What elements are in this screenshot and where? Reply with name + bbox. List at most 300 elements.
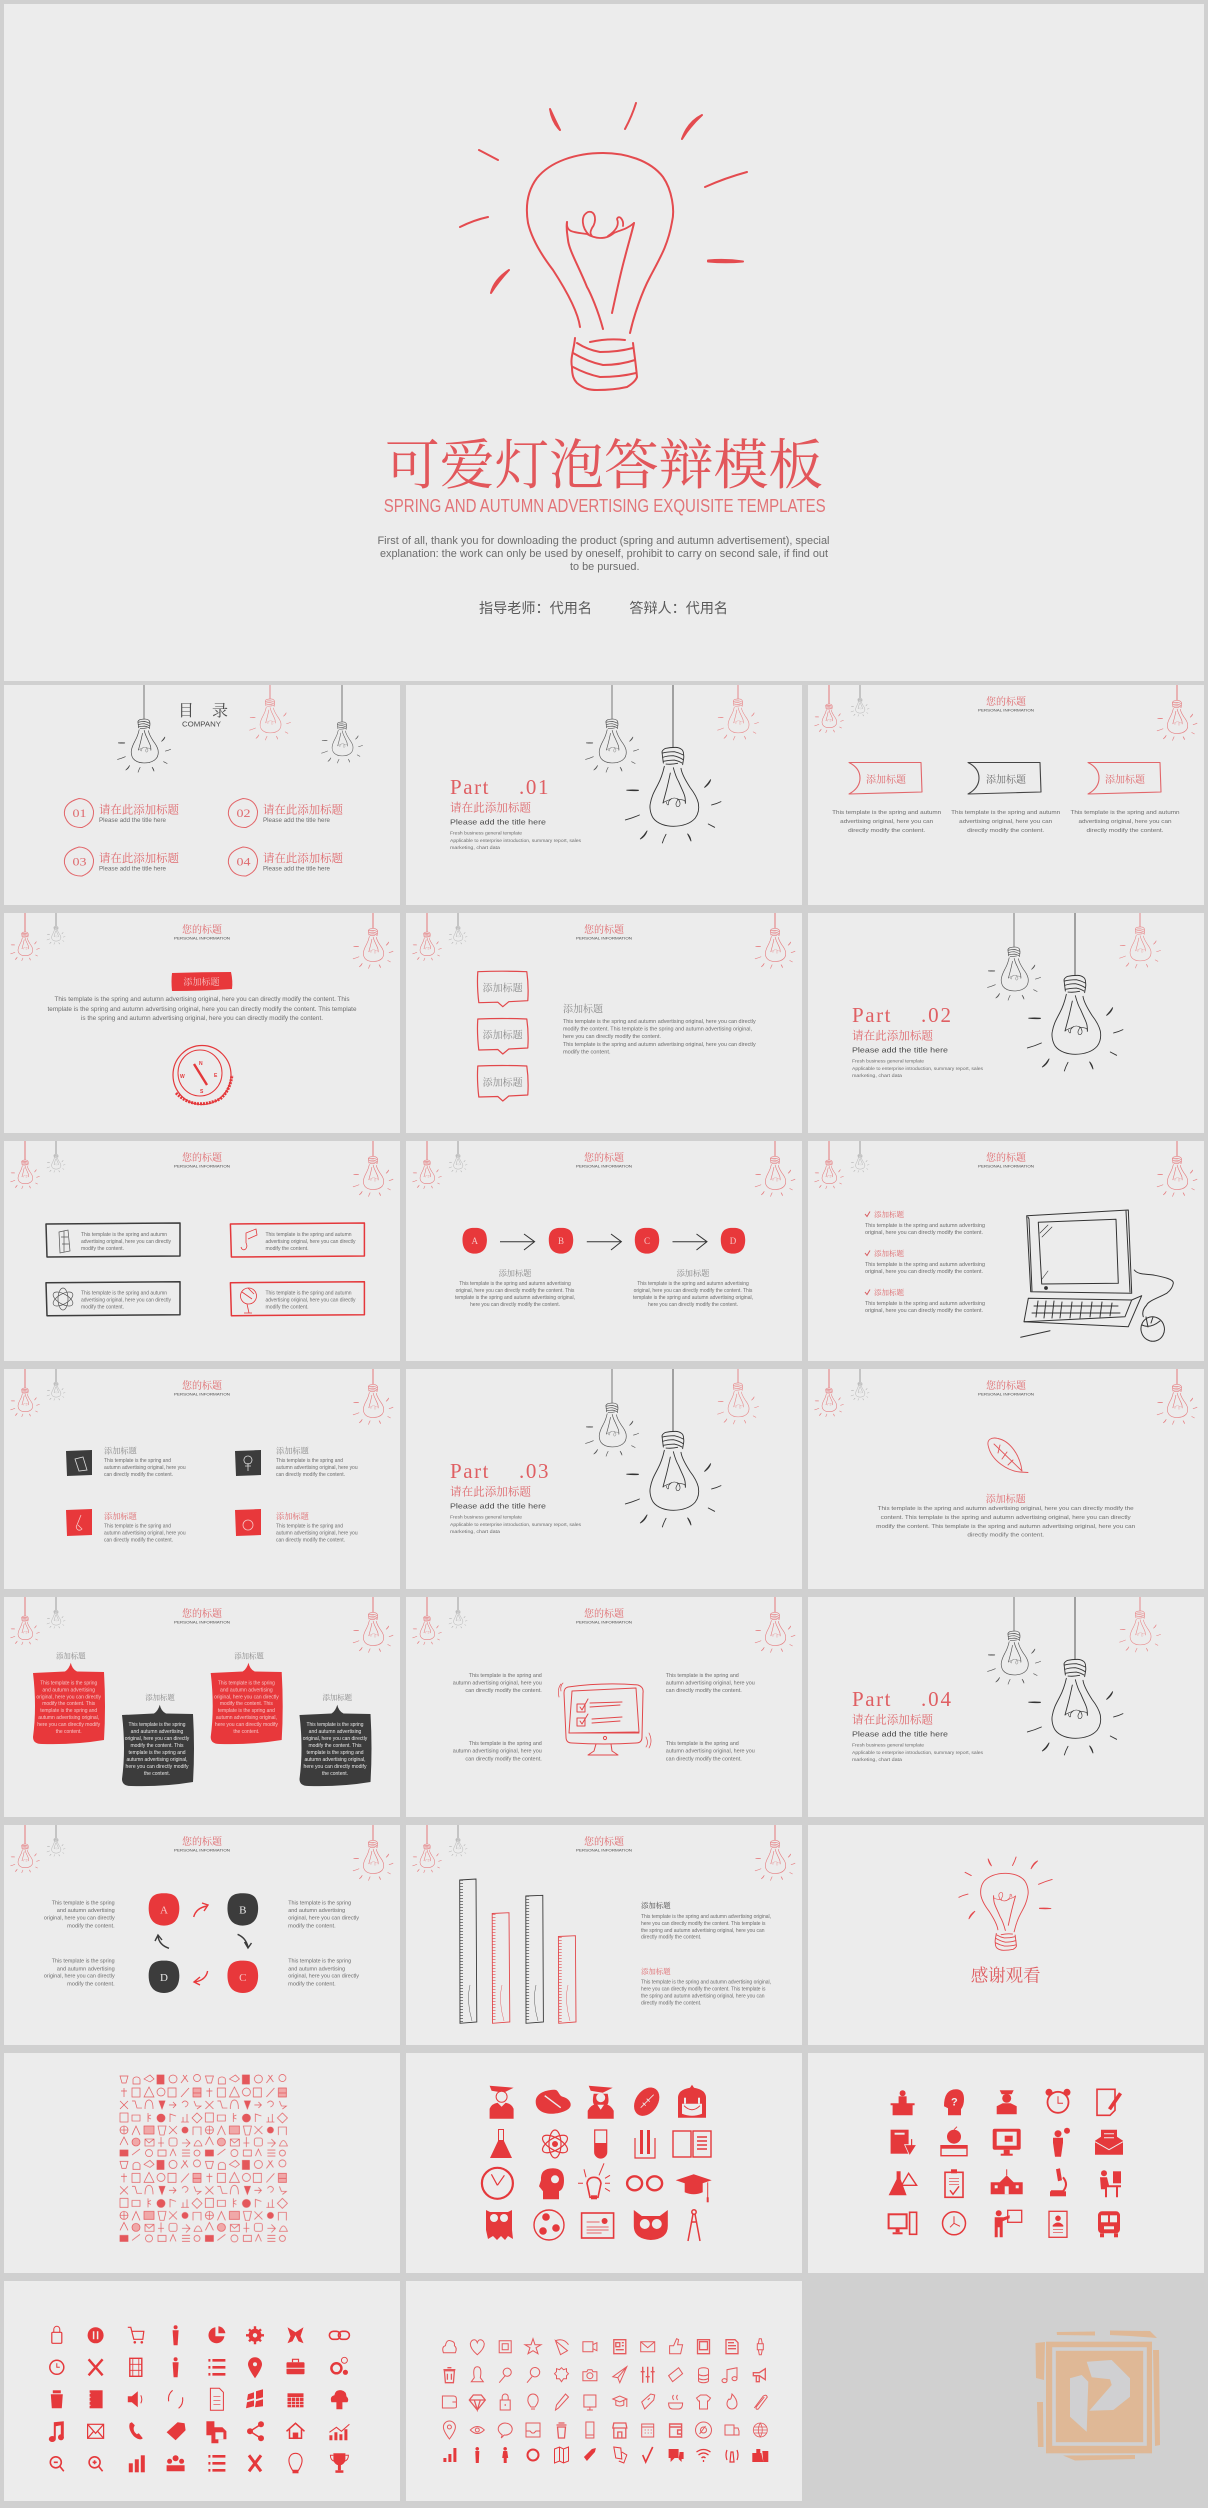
icon: hanging bulbs xyxy=(586,685,759,843)
node D xyxy=(149,1961,179,1993)
framed box 1: advertising original, here you can directly xyxy=(81,1239,171,1245)
panel: education solid icons xyxy=(406,2053,802,2273)
icon: soccer ball xyxy=(534,2210,564,2240)
icon: certificate xyxy=(582,2213,614,2238)
check item 1: original, here you can directly modify the content. xyxy=(865,1230,983,1236)
text upper left: original, here you can directly xyxy=(44,1916,115,1922)
text upper right xyxy=(666,1673,755,1694)
icon: header bulbs xyxy=(815,685,1197,740)
contents item 02: Please add the title here xyxy=(263,818,331,824)
section description: Applicable to enterprise introduction, summary report, sales xyxy=(852,1750,984,1755)
chart text block 2: here you can directly modify the content. This template is xyxy=(641,1987,766,1993)
item: dark square 1: can directly modify the content. xyxy=(104,1472,173,1478)
dark bubble 2: This template is the spring xyxy=(306,1722,364,1728)
icon: compass: S xyxy=(200,1089,204,1095)
flag text 3: This template is the spring and autumn xyxy=(1070,810,1180,816)
text block left: original, here you can directly modify the content. This xyxy=(456,1288,575,1294)
slide title: 您的标题 xyxy=(182,1379,222,1392)
cover presenter names: 指导老师：代用名 xyxy=(479,600,592,616)
panel: ruler bar chart xyxy=(406,1825,802,2045)
contents item 04: 04 xyxy=(236,854,250,868)
framed box 1: modify the content. xyxy=(81,1246,124,1252)
text lower left: modify the content. xyxy=(67,1981,115,1987)
dark bubble 2: modify the content. This xyxy=(308,1743,362,1749)
body text: modify the content. This template is the spring and autumn advertising original, here you can xyxy=(876,1524,1135,1530)
section description: Fresh business general template xyxy=(852,1058,925,1064)
arrow C to D xyxy=(194,1971,208,1985)
panel: three flag labels xyxy=(808,685,1204,905)
icon: ID badge xyxy=(1049,2211,1067,2237)
text block right: original, here you can directly modify the content. This xyxy=(634,1288,753,1294)
flag label 3 xyxy=(1088,762,1161,794)
heading: 添加标题 xyxy=(986,1492,1026,1506)
contents item 04: Please add the title here xyxy=(263,866,331,872)
red banner label: 添加标题 xyxy=(183,976,220,987)
slide subtitle: PERSONAL INFORMATION xyxy=(174,1164,230,1168)
section heading: Part xyxy=(852,1687,891,1711)
callout 3: 添加标题 xyxy=(483,1076,523,1089)
thank-you text: 感谢观看 xyxy=(971,1966,1041,1986)
slide title: 您的标题 xyxy=(584,1835,624,1848)
contents item 01: Please add the title here xyxy=(99,818,167,824)
icon: line icon cluster xyxy=(118,2073,290,2244)
red bubble 2: and autumn advertising xyxy=(220,1688,273,1694)
slide subtitle: PERSONAL INFORMATION xyxy=(174,1848,230,1852)
framed box 2 xyxy=(230,1223,364,1257)
dark bubble 1: 添加标题 xyxy=(145,1693,175,1702)
section heading xyxy=(450,1459,548,1483)
text upper right: can directly modify the content. xyxy=(666,1688,742,1694)
icon: header bulbs xyxy=(815,1369,1197,1424)
text lower left: This template is the spring xyxy=(52,1958,115,1964)
item: red square 2 xyxy=(235,1509,358,1544)
section description xyxy=(450,1514,582,1534)
flag text 2: directly modify the content. xyxy=(967,828,1045,834)
section heading: Part xyxy=(450,1459,489,1483)
text lower right: modify the content. xyxy=(288,1981,336,1987)
item: dark square 2: 添加标题 xyxy=(276,1446,309,1456)
text lower left: and autumn advertising xyxy=(57,1966,115,1972)
chart text block 2: 添加标题 xyxy=(641,1967,671,1976)
chart text block 2: This template is the spring and autumn advertising original, xyxy=(641,1980,771,1986)
slide subtitle: PERSONAL INFORMATION xyxy=(174,1392,230,1396)
text block left: here you can directly modify the content. xyxy=(470,1302,560,1308)
icon: header bulbs xyxy=(413,913,795,968)
slide title: 您的标题 xyxy=(182,923,222,936)
icon: round clock xyxy=(942,2212,966,2235)
chart text block 1 xyxy=(641,1901,771,1941)
arrow A to B xyxy=(500,1234,535,1250)
dark bubble 2: and autumn advertising xyxy=(309,1729,361,1735)
section heading xyxy=(852,1687,952,1711)
framed box 3: modify the content. xyxy=(81,1304,124,1310)
text upper right: autumn advertising original, here you xyxy=(666,1681,755,1687)
cover description xyxy=(378,535,830,573)
framed box 4 xyxy=(230,1282,364,1316)
icon: drawing compass xyxy=(688,2210,700,2241)
text upper left xyxy=(453,1673,542,1694)
section heading: .03 xyxy=(519,1459,548,1483)
red bubble 2: 添加标题 xyxy=(234,1652,264,1660)
body text: This template is the spring and autumn advertising original, here you can directly modify the content. This xyxy=(54,997,350,1003)
icon: speaker at lectern xyxy=(1053,2128,1070,2157)
flag label 2 xyxy=(968,762,1041,794)
icon: glasses xyxy=(627,2176,662,2190)
item: red square 2: This template is the spring and xyxy=(276,1524,343,1530)
body text: modify the content. xyxy=(563,1049,610,1055)
icon: lecturer at desk xyxy=(891,2090,915,2115)
icon: test tube xyxy=(595,2130,607,2158)
icon: hanging bulbs xyxy=(988,913,1161,1071)
text lower right: original, here you can directly xyxy=(288,1974,359,1980)
icon grid: 12 by 4 outline icons xyxy=(442,2339,767,2439)
check item 2: 添加标题 xyxy=(874,1248,904,1258)
section heading: Part xyxy=(450,775,489,799)
text lower right xyxy=(288,1958,359,1987)
cover description: First of all, thank you for downloading the product (spring and autumn advertisement), special xyxy=(378,535,830,547)
text lower left: autumn advertising original, here you xyxy=(453,1749,542,1755)
icon: hanging bulbs xyxy=(988,1597,1161,1755)
body text: This template is the spring and autumn advertising original, here you can directly modify the xyxy=(878,1506,1134,1512)
icon: football xyxy=(629,2083,665,2121)
icon: header bulbs xyxy=(11,1141,393,1196)
red bubble 1: modify the content. This xyxy=(42,1701,96,1707)
text block right: 添加标题 xyxy=(677,1268,709,1278)
body text: is the spring and autumn advertising original, here you can directly modify the content. xyxy=(81,1016,323,1022)
icon: wall clock xyxy=(482,2168,513,2199)
panel: checklist and computer sketch xyxy=(808,1141,1204,1361)
red bubble 2: original, here you can directly xyxy=(214,1694,279,1700)
slide subtitle: PERSONAL INFORMATION xyxy=(576,1164,632,1168)
framed box 3 xyxy=(46,1282,180,1316)
icon: monitor xyxy=(993,2129,1021,2156)
contents item 01: 请在此添加标题 xyxy=(99,802,180,816)
dark bubble 2: 添加标题 xyxy=(323,1693,353,1702)
dark bubble 1: the content. xyxy=(144,1771,170,1777)
section heading xyxy=(450,775,548,799)
text block right: here you can directly modify the content. xyxy=(648,1302,738,1308)
node D: D xyxy=(160,1972,168,1984)
icon: teacher with board xyxy=(995,2210,1022,2237)
flag text 3: directly modify the content. xyxy=(1086,828,1164,834)
icon: idea bulb xyxy=(578,2163,610,2199)
slide subtitle: PERSONAL INFORMATION xyxy=(174,1620,230,1624)
icon: envelope letter xyxy=(1095,2130,1123,2155)
section description: Fresh business general template xyxy=(852,1742,925,1748)
text upper left: and autumn advertising xyxy=(57,1908,115,1914)
red bubble 1: the content. xyxy=(56,1729,82,1735)
red bubble 1 xyxy=(33,1652,105,1744)
step C xyxy=(635,1228,659,1254)
panel: leaf slide xyxy=(808,1369,1204,1589)
icon: leaf xyxy=(988,1438,1028,1472)
flag text 1: advertising original, here you can xyxy=(840,819,933,825)
cover presenter names: 答辩人：代用名 xyxy=(629,600,728,616)
flag text 3 xyxy=(1070,810,1180,834)
chart text block 1: the spring and autumn advertising original, here you can xyxy=(641,1928,764,1934)
dark bubble 1 xyxy=(122,1693,194,1786)
callout 1: 添加标题 xyxy=(483,982,523,994)
red bubble 2: This template is the spring xyxy=(218,1680,275,1686)
callout 2 xyxy=(477,1018,528,1054)
step A: A xyxy=(471,1236,478,1246)
icon: atom xyxy=(540,2130,570,2158)
arrow B to C xyxy=(238,1934,252,1948)
contents item 03 xyxy=(64,847,180,876)
red bubble 1: here you can directly modify xyxy=(37,1722,101,1728)
callout 2: 添加标题 xyxy=(483,1029,523,1042)
red bubble 2: autumn advertising original, xyxy=(216,1715,277,1721)
ruler bar 3 xyxy=(526,1895,543,2023)
slide title: 您的标题 xyxy=(584,1607,624,1620)
framed box 4: modify the content. xyxy=(266,1304,308,1310)
contents item 04 xyxy=(228,847,344,876)
icon: head profile xyxy=(539,2168,564,2199)
icon: cover light bulb xyxy=(460,103,747,390)
panel: speech bubbles slide xyxy=(4,1597,400,1817)
item: dark square 2 xyxy=(235,1446,358,1478)
icon: school building xyxy=(991,2169,1023,2194)
icon: officer xyxy=(997,2090,1017,2114)
icon: computer sketch xyxy=(1021,1210,1173,1344)
item: red square 1: can directly modify the content. xyxy=(104,1538,173,1544)
section description: Fresh business general template xyxy=(450,1514,523,1520)
logo: tan P stamp xyxy=(1036,2330,1160,2460)
section description: Fresh business general template xyxy=(450,830,523,836)
red bubble 2 xyxy=(211,1652,283,1744)
icon: clipboard xyxy=(945,2169,963,2197)
text lower left: original, here you can directly xyxy=(44,1974,115,1980)
icon: warning flasks xyxy=(889,2171,917,2195)
framed box 3: advertising original, here you can directly xyxy=(81,1298,171,1304)
chart text block 1: 添加标题 xyxy=(641,1901,671,1910)
text lower right xyxy=(666,1741,755,1762)
contents item 03: 03 xyxy=(72,854,86,868)
chart text block 1: This template is the spring and autumn advertising original, xyxy=(641,1914,771,1920)
callout 3 xyxy=(477,1066,528,1101)
icon row: mixed solid icons xyxy=(443,2447,768,2463)
cover description: explanation: the work can only be used by oneself, prohibit to carry on second sale, if find out xyxy=(380,548,828,560)
chart text block 2: directly modify the content. xyxy=(641,2000,701,2006)
text upper left: This template is the spring xyxy=(52,1900,115,1906)
section subheading: 请在此添加标题 xyxy=(852,1712,933,1726)
contents item 02: 02 xyxy=(236,806,250,820)
icon: owl face xyxy=(634,2210,668,2240)
text block left: This template is the spring and autumn advertising xyxy=(459,1281,571,1287)
dark bubble 2: autumn advertising original, xyxy=(304,1757,366,1763)
node B: B xyxy=(239,1904,246,1916)
check item 1: This template is the spring and autumn advertising xyxy=(865,1223,985,1229)
icon: header bulbs xyxy=(815,1141,1197,1196)
red bubble 1: autumn advertising original, xyxy=(38,1715,99,1721)
cover english subtitle: SPRING AND AUTUMN ADVERTISING EXQUISITE TEMPLATES xyxy=(384,496,826,516)
arrow C to D xyxy=(672,1234,707,1250)
flag text 3: advertising original, here you can xyxy=(1078,819,1172,825)
cover title: 可爱灯泡答辩模板 xyxy=(385,435,823,496)
text upper left: This template is the spring and xyxy=(469,1673,542,1679)
item: dark square 1 xyxy=(66,1446,186,1478)
text lower left xyxy=(44,1958,115,1987)
dark bubble 1: autumn advertising original, xyxy=(126,1757,188,1763)
section description xyxy=(450,830,582,850)
slide title: 您的标题 xyxy=(986,1379,1026,1392)
text block right xyxy=(633,1268,753,1308)
section description: marketing, chart data xyxy=(852,1073,903,1078)
text block right: template is the spring and autumn advertising original, xyxy=(633,1295,753,1301)
check item 1 xyxy=(865,1209,985,1236)
dark bubble 1: original, here you can directly xyxy=(125,1736,190,1742)
body text: modify the content. This template is the spring and autumn advertising original, xyxy=(563,1026,753,1032)
slide title: 您的标题 xyxy=(986,695,1026,708)
check item 3 xyxy=(865,1287,985,1314)
panel: section Part 02 xyxy=(808,913,1204,1133)
item: dark square 1: 添加标题 xyxy=(104,1446,137,1456)
section english line: Please add the title here xyxy=(852,1730,948,1738)
icon: compass: E xyxy=(214,1073,218,1079)
flag label 2: 添加标题 xyxy=(986,773,1026,786)
text lower right: autumn advertising original, here you xyxy=(666,1749,755,1755)
item: red square 1: autumn advertising original, here you xyxy=(104,1531,186,1537)
icon: tubes in rack xyxy=(635,2130,655,2158)
text block right: This template is the spring and autumn advertising xyxy=(637,1281,749,1287)
section english line: Please add the title here xyxy=(852,1046,948,1054)
cover presenter names xyxy=(479,600,728,616)
text lower left: This template is the spring and xyxy=(469,1741,542,1747)
icon: compass xyxy=(173,1046,232,1104)
section description: marketing, chart data xyxy=(450,845,501,850)
slide subtitle: PERSONAL INFORMATION xyxy=(978,1392,1034,1396)
text upper left: modify the content. xyxy=(67,1923,115,1929)
slide title: 您的标题 xyxy=(182,1607,222,1620)
step D: D xyxy=(730,1236,737,1246)
slide subtitle: PERSONAL INFORMATION xyxy=(576,1620,632,1624)
text upper right: modify the content. xyxy=(288,1923,336,1929)
text upper right: original, here you can directly xyxy=(288,1916,359,1922)
step B xyxy=(549,1228,573,1254)
dark bubble 2: template is the spring and xyxy=(306,1750,364,1756)
red bubble 2: template is the spring and xyxy=(218,1708,275,1714)
section heading: .02 xyxy=(921,1003,951,1027)
text upper right: This template is the spring and xyxy=(666,1673,739,1679)
dark bubble 1: modify the content. This xyxy=(130,1743,184,1749)
text block left: template is the spring and autumn advertising original, xyxy=(455,1295,575,1301)
icon: paper and pen xyxy=(1097,2089,1122,2115)
section subheading: 请在此添加标题 xyxy=(450,800,531,814)
red banner label xyxy=(172,972,232,991)
framed box 1 xyxy=(46,1223,180,1257)
text upper right: and autumn advertising xyxy=(288,1908,345,1914)
text block left xyxy=(455,1268,575,1308)
slide subtitle: PERSONAL INFORMATION xyxy=(978,1164,1034,1168)
arrow B to C xyxy=(587,1234,621,1250)
body text xyxy=(563,1019,756,1055)
cover panel xyxy=(4,4,1204,681)
body text: This template is the spring and autumn advertising original, here you can directly xyxy=(563,1019,756,1025)
icon: header bulbs xyxy=(11,1369,393,1424)
panel: four framed icon boxes xyxy=(4,1141,400,1361)
flag label 1 xyxy=(849,762,922,794)
icon: compass: N xyxy=(199,1061,203,1067)
icon: compass: W xyxy=(180,1074,185,1080)
icon: monitor with checklist xyxy=(558,1683,651,1755)
framed box 2: modify the content. xyxy=(266,1246,308,1252)
panel: section Part 04 xyxy=(808,1597,1204,1817)
text lower right: can directly modify the content. xyxy=(666,1756,742,1762)
flag text 1: directly modify the content. xyxy=(848,828,926,834)
section description: Applicable to enterprise introduction, summary report, sales xyxy=(450,1522,582,1527)
panel: monitor slide xyxy=(406,1597,802,1817)
body text xyxy=(48,997,357,1022)
item: red square 1: This template is the spring and xyxy=(104,1524,171,1530)
section description xyxy=(852,1742,984,1762)
icon grid: 8 by 5 solid icons xyxy=(49,2325,349,2473)
item: red square 2: autumn advertising original, here you xyxy=(276,1531,358,1537)
text lower left: can directly modify the content. xyxy=(465,1756,542,1762)
check item 3: original, here you can directly modify the content. xyxy=(865,1308,983,1314)
flag text 1: This template is the spring and autumn xyxy=(832,810,941,816)
step A xyxy=(462,1228,487,1254)
panel: compass slide xyxy=(4,913,400,1133)
contents subtitle: COMPANY xyxy=(182,722,221,728)
dark bubble 2 xyxy=(300,1693,372,1786)
icon: header bulbs xyxy=(11,1825,393,1880)
body text: This template is the spring and autumn advertising original, here you can directly xyxy=(563,1042,756,1048)
text upper left xyxy=(44,1900,115,1929)
cover description: to be pursued. xyxy=(570,561,640,573)
section heading: .04 xyxy=(921,1687,952,1711)
icon: header bulbs xyxy=(413,1825,795,1880)
framed box 3: This template is the spring and autumn xyxy=(81,1290,167,1296)
icon: mortarboard xyxy=(676,2174,712,2202)
body text: here you can directly modify the content. xyxy=(563,1034,661,1040)
dark bubble 1: here you can directly modify xyxy=(126,1764,189,1770)
icon: header bulbs xyxy=(413,1141,795,1196)
slide subtitle: PERSONAL INFORMATION xyxy=(174,936,230,940)
red bubble 2: here you can directly modify xyxy=(215,1722,278,1728)
panel: thank you slide xyxy=(808,1825,1204,2045)
item: red square 2: can directly modify the content. xyxy=(276,1538,345,1544)
ruler bar 4 xyxy=(558,1936,576,2023)
panel: four squares with text xyxy=(4,1369,400,1589)
slide title: 您的标题 xyxy=(182,1151,222,1164)
dark bubble 2: here you can directly modify xyxy=(304,1764,367,1770)
text lower right: This template is the spring xyxy=(288,1958,351,1964)
contents item 02: 请在此添加标题 xyxy=(263,802,344,816)
red bubble 1: original, here you can directly xyxy=(36,1694,101,1700)
body text xyxy=(876,1506,1135,1539)
text upper left: autumn advertising original, here you xyxy=(453,1681,542,1687)
panel: general solid icons xyxy=(4,2281,400,2501)
red bubble 1: This template is the spring xyxy=(40,1680,97,1686)
icon: apple on books xyxy=(941,2127,967,2156)
text lower right: and autumn advertising xyxy=(288,1966,345,1972)
node C: C xyxy=(239,1972,246,1984)
check item 2 xyxy=(865,1248,985,1275)
framed box 2: advertising original, here you can directly xyxy=(266,1239,356,1245)
step B: B xyxy=(558,1236,564,1246)
icon: desktop computer xyxy=(889,2212,917,2234)
panel: section Part 01 xyxy=(406,685,802,905)
icon: hanging bulbs xyxy=(586,1369,759,1527)
icon: student at desk xyxy=(1100,2170,1121,2197)
section description: Applicable to enterprise introduction, summary report, sales xyxy=(852,1066,984,1071)
slide title: 您的标题 xyxy=(584,1151,624,1164)
slide subtitle: PERSONAL INFORMATION xyxy=(576,1848,632,1852)
dark bubble 2: the content. xyxy=(322,1771,348,1777)
icon: palette xyxy=(536,2090,571,2114)
flag text 2: This template is the spring and autumn xyxy=(951,810,1060,816)
icon: header bulbs xyxy=(11,913,393,968)
